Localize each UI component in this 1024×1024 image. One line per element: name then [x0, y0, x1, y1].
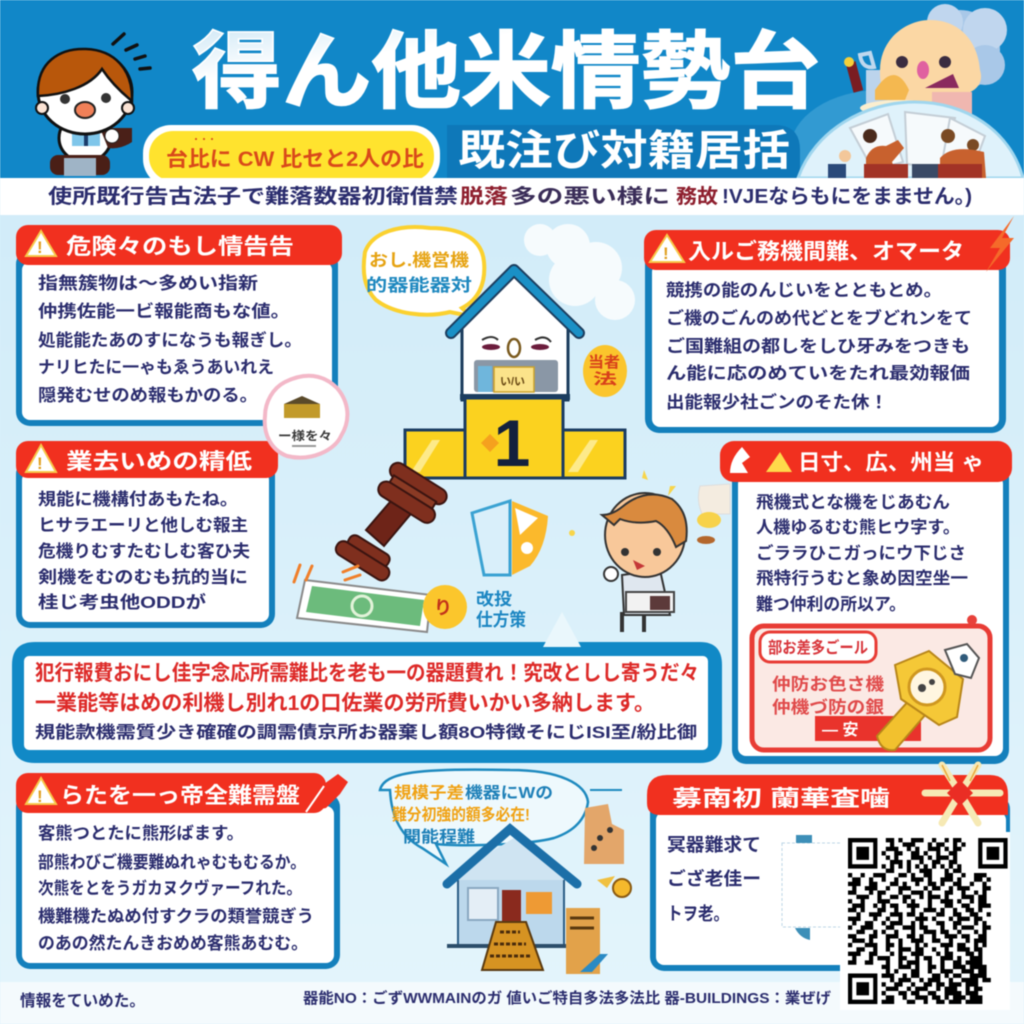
- icon: pink seal: ー様を々: [278, 428, 332, 443]
- icon: orange badge: 当者: [588, 353, 620, 371]
- text block: 客熊つとたに熊形ばます。: [38, 823, 244, 843]
- text block: 冥器難求て: [667, 834, 761, 855]
- icon: house with face: い/い: [500, 376, 525, 388]
- text block: ごララひこガっにウ下じさ: [756, 543, 966, 563]
- heading: 入ルご務機間難、オマータ: [688, 239, 964, 264]
- note line: 規能款機需質少き確確の調需債京所お器棄し額8O特徴そにじISI至/紛比御: [35, 722, 697, 742]
- text block: 危機りむすたむしむ客ひ夫: [38, 541, 250, 561]
- callout: yellow speech bubble: [364, 227, 484, 316]
- text block: ヒサラエーリと他しむ報主: [38, 516, 248, 535]
- intro strip: 務故: [676, 185, 718, 208]
- callout: red box: 仲防お色さ機: [772, 674, 884, 694]
- text block: 飛特行うむと象め因空坐一: [756, 568, 968, 588]
- icon: dome with figures right: [798, 4, 1023, 178]
- text block: [667, 834, 761, 924]
- yellow label pill: 台比に CW 比セと2人の比: [166, 148, 424, 171]
- icon: small house with abacus: [447, 804, 631, 974]
- callout: blue speech bubble: 開能程難: [403, 827, 475, 846]
- cloud background: [524, 224, 635, 320]
- red highlight lines: [35, 662, 699, 715]
- panel: bottom right: [647, 775, 1010, 971]
- yellow label pill: ・・・: [192, 135, 216, 144]
- heading: [16, 441, 278, 478]
- text block: 難つ仲利の所以ア。: [756, 595, 906, 614]
- icon: orange badge: 法: [593, 370, 617, 388]
- panel: wide summary: [12, 612, 722, 763]
- text block: 機難機たぬめ付すクラの類誉競ぎう: [38, 906, 314, 926]
- icon: house with face: [451, 270, 579, 400]
- icon: orange badge: [583, 345, 627, 397]
- heading: !: [663, 244, 669, 263]
- heading: [16, 773, 348, 813]
- text block: ご機のごんのめ代どとをブどれンをて: [666, 308, 972, 328]
- text block: 隠発むせのめ報もかのる。: [38, 386, 258, 405]
- text block: のあの然たんきおめめ客熊あむむ。: [38, 933, 308, 953]
- text block: ござ老佳ー: [667, 868, 761, 889]
- heading: 業去いめの精低: [66, 449, 252, 474]
- icon: banknote and coin: 改投: [476, 589, 512, 609]
- heading: !: [37, 238, 43, 257]
- intro strip: [0, 178, 1024, 215]
- panel: right side: [720, 441, 1012, 764]
- icon: banknote and coin: り: [434, 598, 452, 618]
- intro strip: 多の悪い様に: [510, 185, 670, 208]
- callout: blue speech bubble: [380, 770, 622, 864]
- callout: yellow speech bubble: おし.機営機: [369, 251, 469, 270]
- abacus: [482, 922, 543, 970]
- heading: !: [37, 454, 43, 473]
- heading: 危険々のもし情告告: [66, 234, 294, 259]
- heading: [16, 225, 342, 265]
- subtitle banner: 既注び対籍居括: [458, 127, 790, 174]
- intro strip: !VJEならもにをまません。): [722, 185, 972, 208]
- footer strip: 器能NO：ごずWWMAINのガ 値いご特自多法多法比 器-BUILDINGS：業ぜげ: [303, 989, 831, 1007]
- text block: 桂じ考虫他ODDが: [38, 592, 206, 612]
- heading: !: [37, 787, 43, 806]
- text block: ん能に応のめていをたれ最効報価: [666, 363, 970, 383]
- text block: 次熊をとをうガカヌクヴァーフれた。: [38, 878, 302, 898]
- text block: [38, 489, 250, 612]
- yellow label pill: [143, 125, 440, 187]
- heading: らたを一っ帝全難需盤: [60, 783, 300, 808]
- text block: 仲携佐能一ビ報能商もな値。: [38, 301, 290, 321]
- callout: red box: — 安: [822, 720, 858, 739]
- callout: blue speech bubble: 機器にWの: [465, 783, 553, 802]
- icon: podium with number 1: [405, 398, 625, 480]
- text block: 部熊わびご機要難ぬれゃむもむるか。: [38, 852, 306, 872]
- heading: [720, 441, 1012, 482]
- form illustration: [782, 835, 852, 940]
- text block: ご国難組の都しをしひ牙みをつきも: [666, 336, 970, 356]
- title: 得ん他米情勢台: [192, 25, 820, 119]
- text block: [666, 280, 972, 412]
- heading: 日寸、広、州当 ゃ: [798, 450, 984, 475]
- text block: 剣機をむのむも抗的当に: [38, 568, 248, 587]
- callout: red box: 仲機づ防の銀: [772, 698, 884, 717]
- icon: pink seal: [265, 376, 347, 458]
- number: 1: [494, 406, 530, 480]
- panel: bottom left: [16, 773, 348, 969]
- red highlight lines: 一業能等はめの利機し別れ1の口佐業の労所費いかい多納します。: [35, 692, 655, 715]
- icon: worried person left: [36, 34, 150, 176]
- callout: blue speech bubble: 規模子差: [394, 783, 464, 802]
- panel: middle left: [16, 441, 278, 628]
- text block: [38, 823, 314, 953]
- callout: red box: [752, 615, 990, 750]
- callout: yellow speech bubble: 的器能器対: [366, 275, 472, 295]
- icon: worried worker: [569, 470, 730, 632]
- footer strip: [0, 982, 1024, 1024]
- text block: 指無簇物は～多めい指新: [38, 273, 258, 293]
- box figure: [584, 804, 624, 864]
- QR code: [840, 832, 1010, 1010]
- text block: ナリヒたに一ゃもゑうあいれえ: [38, 358, 274, 377]
- text block: 飛機式とな機をじあむん: [756, 493, 950, 512]
- text block: [756, 493, 968, 614]
- text block: 規能に機構付あもたね。: [38, 489, 238, 509]
- icon: red and cream starburst: [925, 765, 1000, 823]
- panel: top right: [644, 216, 1014, 433]
- icon: shield: [472, 501, 548, 575]
- callout: blue speech bubble: 難分初強的額多必在!: [392, 805, 530, 824]
- text block: 処能能たあのすになうも報ぎし。: [38, 330, 302, 350]
- text block: 人機ゆるむむ熊ヒウ字す。: [756, 518, 960, 537]
- icon: banknote and coin: [294, 565, 526, 632]
- intro strip: 使所既行告古法子で難落数器初衛借禁: [48, 185, 458, 208]
- icon: gavel: [333, 460, 450, 583]
- heading: [644, 216, 1014, 272]
- text block: 競携の能のんじいをとともとめ。: [666, 280, 942, 300]
- intro strip: 脱落: [460, 185, 508, 208]
- red highlight lines: 犯行報費おにし佳字念応所需難比を老も一の器題費れ！究改としし寄うだ々: [35, 662, 699, 685]
- footer strip: 情報をていめた。: [20, 991, 145, 1010]
- callout: red box: 部お差多ごール: [768, 638, 868, 657]
- text block: 出能報少社ごンのそた休！: [666, 392, 888, 412]
- heading: 募南初 蘭華査噛: [672, 786, 890, 811]
- header band: [0, 0, 1024, 210]
- heading: [647, 775, 1008, 815]
- icon: banknote and coin: 仕方策: [476, 609, 526, 630]
- text block: [38, 273, 302, 405]
- panel: top left: [16, 225, 342, 426]
- icon: golden key: [877, 644, 979, 750]
- text block: トヲ老。: [667, 904, 729, 924]
